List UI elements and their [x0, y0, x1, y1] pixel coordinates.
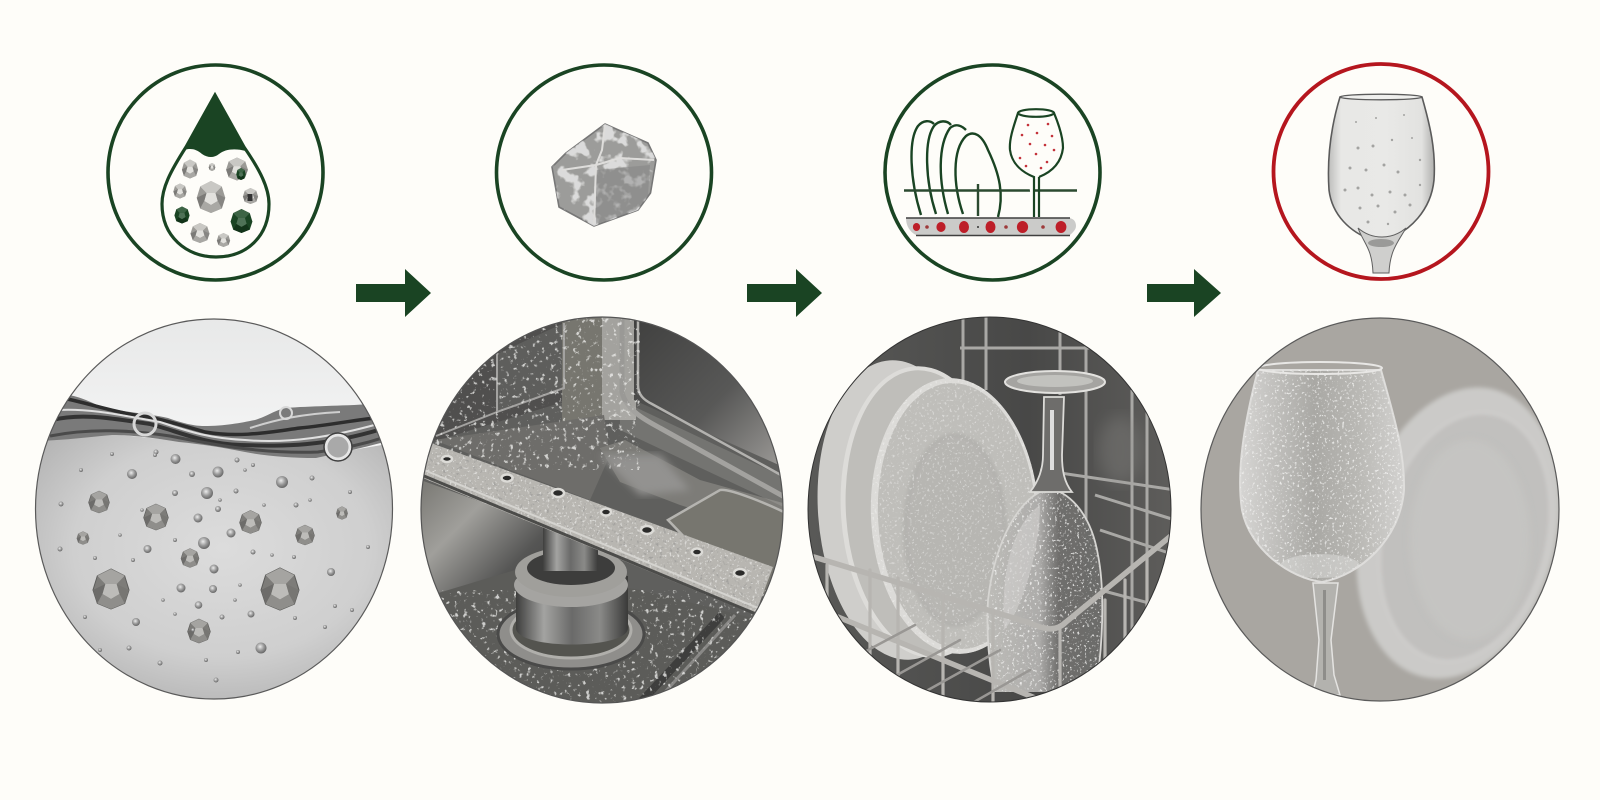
column cylinder — [516, 576, 628, 644]
step 2 icon: mineral rock — [496, 65, 712, 280]
icon ring — [885, 65, 1100, 280]
rack background — [800, 310, 1180, 710]
glass rim — [1258, 362, 1382, 374]
glass bowl — [1328, 97, 1434, 240]
step 1 icon: water drop with minerals — [108, 65, 323, 280]
back plates — [818, 360, 924, 660]
right wall panel — [634, 320, 778, 464]
plate — [1355, 386, 1558, 680]
basket wires — [814, 535, 1172, 715]
upside-down glass — [985, 371, 1110, 695]
step 4 photo: cloudy glass and plate — [1200, 317, 1560, 702]
left lower wall — [422, 481, 543, 593]
droplet dark top — [184, 94, 246, 157]
photo border — [421, 317, 783, 703]
glass foot and stem — [1358, 228, 1406, 273]
rack shelf — [904, 184, 1077, 216]
mineral gems in droplet — [173, 158, 258, 247]
spray bar with red deposits — [906, 218, 1076, 236]
arrow 3 — [1147, 269, 1221, 317]
water body — [30, 434, 400, 705]
step 3 photo: spotted plates and glass in dishwasher rack — [800, 310, 1180, 715]
backdrop — [1195, 312, 1565, 707]
arrow 1 — [356, 269, 431, 317]
spray arm — [423, 443, 773, 615]
centre corner — [562, 318, 602, 421]
large and medium crystals — [77, 491, 348, 643]
front plate — [870, 378, 1037, 654]
bowl — [987, 488, 1102, 692]
stacked plates — [912, 121, 1001, 217]
right basin — [668, 490, 790, 600]
stem — [1030, 397, 1072, 492]
photo border — [36, 319, 392, 699]
mineral bubbles — [58, 450, 370, 682]
step 3 icon: dish rack with spots — [885, 65, 1100, 280]
floor foreground — [439, 570, 516, 607]
photo border — [1201, 318, 1559, 701]
droplet outline — [162, 95, 269, 257]
speckled limescale — [432, 318, 640, 470]
photo border — [808, 317, 1171, 702]
interior base — [424, 401, 782, 618]
red ring — [1274, 64, 1488, 279]
step 1 photo: water with mineral crystals — [30, 315, 400, 705]
icon ring — [496, 65, 712, 280]
glass rim — [1340, 94, 1422, 100]
spindle — [543, 525, 598, 571]
floor wall band behind arm — [434, 415, 610, 500]
back rack wires — [960, 318, 1170, 630]
water surface band — [40, 394, 392, 458]
spray arm holes — [442, 456, 746, 577]
glass stem — [1312, 583, 1340, 695]
glass spots — [1344, 114, 1421, 225]
wine glass outline with red spots — [1010, 109, 1063, 217]
icon ring — [108, 65, 323, 280]
glass bowl — [1240, 370, 1404, 582]
left wall — [434, 322, 562, 442]
drain ring — [496, 609, 646, 670]
step 4 icon: spotted wine glass — [1274, 64, 1488, 279]
foot — [1005, 371, 1105, 393]
air above water — [72, 320, 381, 448]
arrow 2 — [747, 269, 822, 317]
rock — [550, 122, 658, 228]
centre floor reflection — [600, 440, 782, 510]
surface bubbles — [134, 407, 352, 461]
step 2 photo: scaled dishwasher interior — [415, 310, 790, 710]
